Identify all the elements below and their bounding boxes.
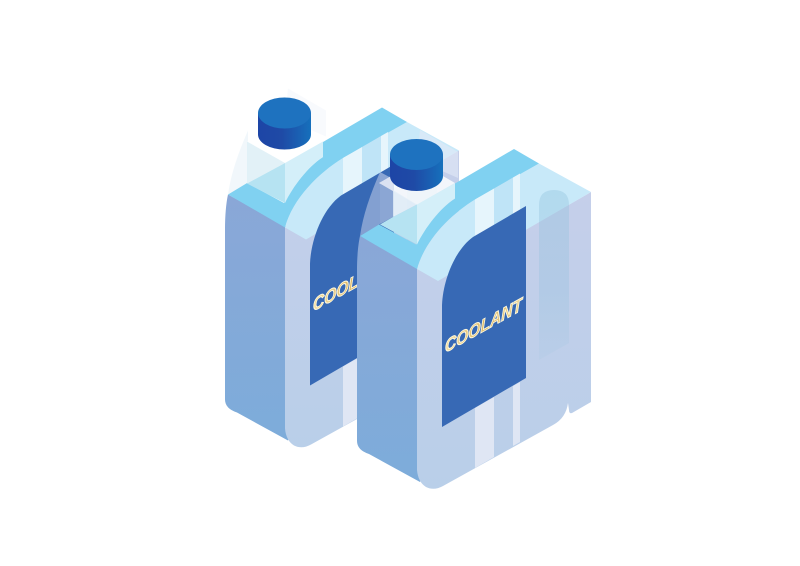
back jug: right body (285, 150, 459, 447)
front jug: neck right wall (417, 183, 455, 244)
front jug: label panel (442, 206, 526, 427)
back jug: handle (407, 148, 437, 318)
front jug: shoulder fan (360, 172, 380, 236)
front jug: light top surface (417, 164, 591, 281)
back jug: light top surface (285, 122, 459, 240)
front jug: neck left wall upper (393, 190, 417, 217)
back jug: neck left wall upper (247, 142, 285, 184)
back jug: cap (258, 98, 311, 150)
front jug: handle (539, 190, 569, 360)
back jug: upper highlight strips (343, 132, 388, 194)
back jug (225, 88, 459, 447)
back jug: lower highlight strips (343, 340, 388, 426)
back jug: label panel (310, 164, 394, 386)
front jug: upper highlight strips (475, 174, 520, 236)
front jug: right body (417, 192, 591, 489)
front jug: cap (390, 139, 443, 191)
back jug: neck left wall over band (247, 163, 285, 203)
front jug: cyan top band (360, 149, 539, 269)
back jug: neck right wall (285, 142, 323, 203)
front jug: left face (357, 236, 440, 482)
back jug: neck back wall (285, 88, 326, 136)
front jug: neck left wall over band (380, 204, 417, 244)
front jug: neck back wall (417, 130, 458, 178)
back jug: cyan top band (228, 108, 407, 228)
back jug: left face (225, 194, 308, 440)
back jug: label text: COOLANT (313, 252, 392, 316)
front jug: neck top (379, 161, 455, 205)
front jug: neck sliver (380, 172, 393, 224)
front jug: label text: COOLANT (445, 293, 524, 358)
back jug: neck top (247, 120, 323, 164)
front jug: lower highlight strips (475, 382, 520, 468)
front jug (357, 130, 591, 489)
back jug: shoulder fan (228, 130, 248, 194)
